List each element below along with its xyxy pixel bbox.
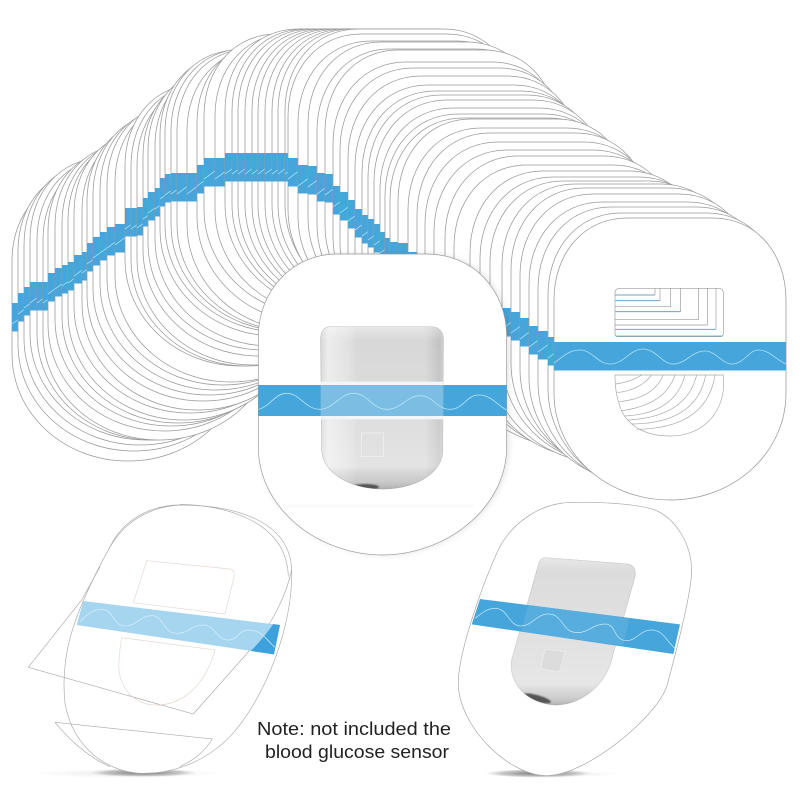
upper window: [133, 561, 234, 614]
sensor device: [511, 558, 635, 705]
patch shadow: [30, 768, 223, 778]
patch outline: [458, 502, 692, 776]
second outline offset: [108, 504, 288, 577]
lower right patch with sensor device: [458, 502, 692, 778]
band wave: [80, 609, 275, 647]
lower left patch with peeled liner: [28, 504, 292, 778]
lower window with nested arcs: [615, 375, 723, 436]
lower window: [119, 638, 215, 705]
stack of adhesive patches: [12, 29, 780, 495]
blue band with wave: [472, 599, 680, 654]
patch shadow: [483, 769, 623, 778]
translucent blue band: [77, 601, 280, 654]
faint fold line: [287, 505, 473, 507]
note text: [257, 719, 451, 762]
blue band with wave: [258, 385, 507, 416]
sensor device: [321, 327, 443, 490]
upper window with nested lines: [615, 288, 723, 337]
centre patch with sensor device: [258, 254, 507, 555]
opaque band end: [251, 624, 280, 654]
lower liner piece: [55, 722, 212, 767]
note text: blood glucose sensor: [265, 742, 449, 762]
patch outline: [64, 505, 292, 773]
centre patch outline: [258, 254, 507, 555]
note text: Note: not included the: [257, 719, 451, 739]
peeled release liner: [28, 567, 292, 714]
front patch with cut-out windows: [554, 218, 786, 500]
